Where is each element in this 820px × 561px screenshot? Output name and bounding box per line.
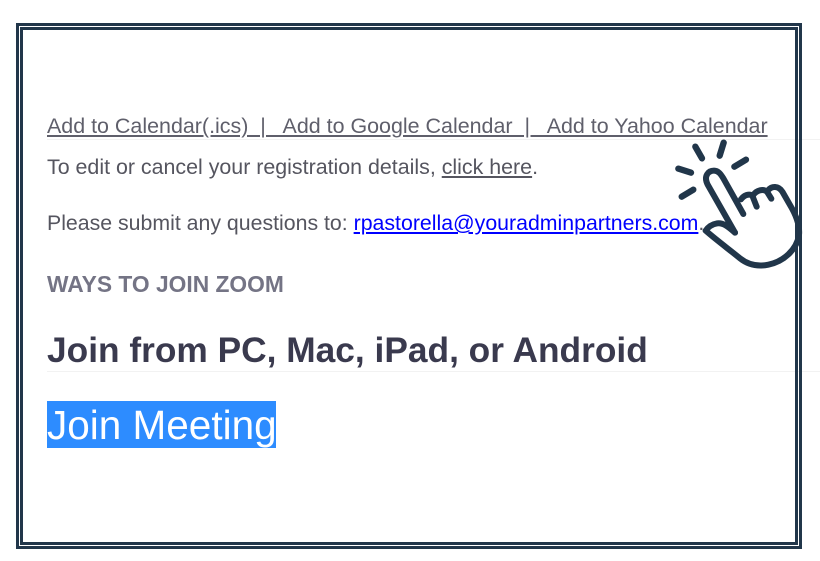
questions contact text: Please submit any questions to: rpastorella@youradminpartners.com. — [47, 211, 704, 235]
join meeting button: Join Meeting — [47, 402, 277, 448]
icon: clicking hand — [675, 140, 802, 268]
heading: Join from PC, Mac, iPad, or Android — [47, 331, 648, 370]
edit registration text: To edit or cancel your registration details, click here. — [47, 155, 538, 179]
faint rule under calendar links — [47, 139, 820, 140]
calendar links: Add to Calendar(.ics) | Add to Google Calendar | Add to Yahoo Calendar — [47, 114, 768, 138]
section label: WAYS TO JOIN ZOOM — [47, 271, 284, 297]
faint rule under join heading — [47, 371, 820, 372]
